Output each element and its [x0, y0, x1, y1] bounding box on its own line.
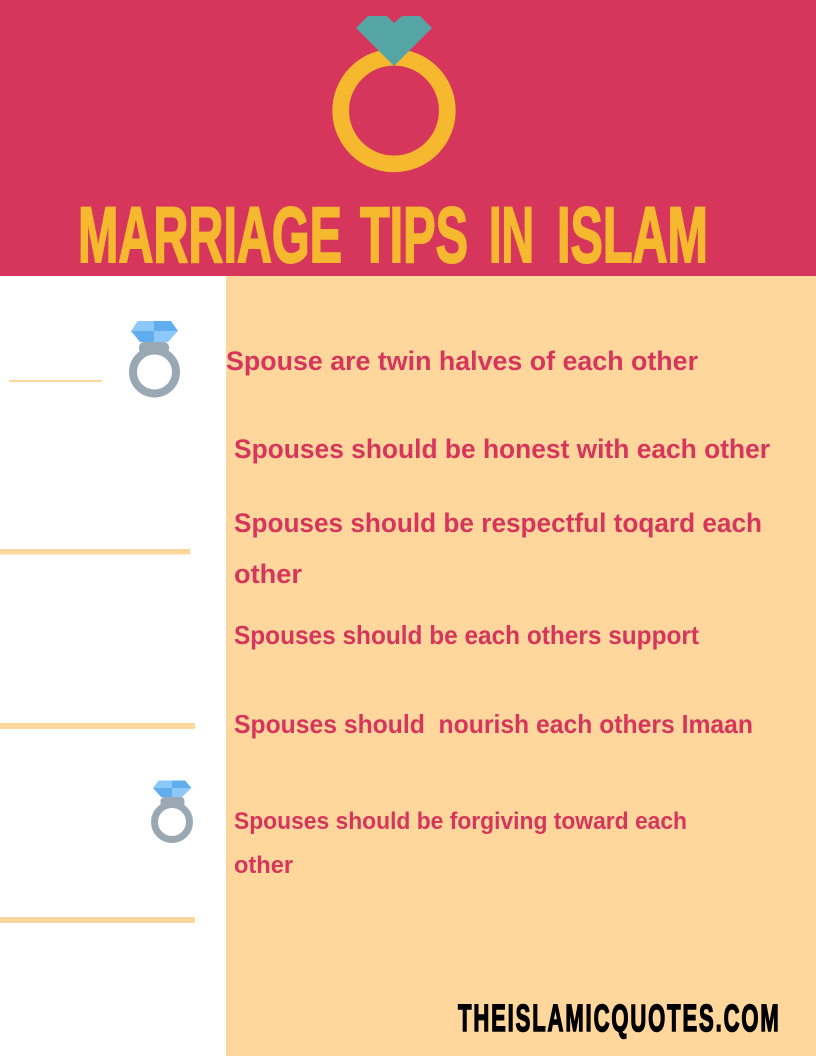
tip five: Spouses should nourish each others Imaan: [234, 709, 753, 739]
tip six: [234, 808, 687, 879]
title: [78, 190, 708, 279]
tip six: Spouses should be forgiving toward each: [234, 808, 687, 835]
icon: gold ring with teal heart gem: [341, 16, 447, 164]
panel: white left column: [0, 276, 226, 1056]
divider line four: [0, 917, 195, 923]
title: MARRIAGE: [78, 190, 342, 279]
panel: header band: [0, 0, 816, 276]
icon: diamond ring one: [131, 321, 178, 394]
tip six: other: [234, 852, 293, 879]
divider line one: [9, 380, 102, 382]
tip three: Spouses should be respectful toqard each: [234, 508, 762, 538]
title: ISLAM: [557, 190, 708, 279]
panel: peach tips column: [226, 276, 816, 1056]
divider line three: [0, 723, 195, 729]
title: IN: [489, 190, 534, 279]
tip two: Spouses should be honest with each other: [234, 434, 770, 464]
divider line two: [0, 549, 190, 554]
tip three: [234, 508, 762, 589]
tip three: other: [234, 559, 302, 589]
footer website: THEISLAMICQUOTES.COM: [458, 997, 779, 1040]
tip four: Spouses should be each others support: [234, 620, 699, 650]
icon: diamond ring two: [153, 780, 192, 840]
title: TIPS: [360, 190, 468, 279]
tip one: Spouse are twin halves of each other: [226, 346, 698, 376]
